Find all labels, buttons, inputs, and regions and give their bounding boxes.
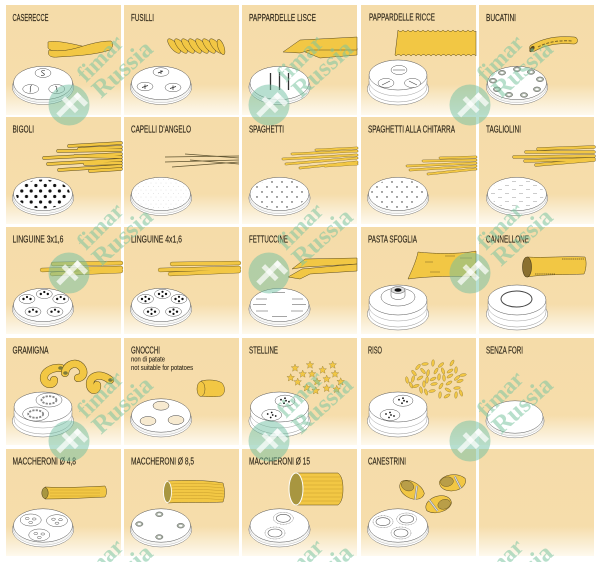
title: tagliolini: TAGLIOLINI [486,124,521,136]
title: fettuccine: FETTUCCINE [249,234,288,246]
panel: bigoli [6,117,121,224]
panel: bucatini [479,5,594,115]
pasta: riso [405,359,467,399]
watermark: fimar Russia logos and text: fimar [272,30,328,87]
watermark: fimar Russia logos and text: fimar [472,198,528,255]
title: linguine 4x1,6: LINGUINE 4x1,6 [131,234,182,246]
pasta: canestrini [396,472,467,516]
die: bucatini [486,66,548,105]
die: maccheroni 8,5 [130,509,192,547]
panel: capelli d'angelo [124,117,239,224]
die: tagliolini [486,177,548,216]
watermark: fimar Russia logos and text: Russia [87,203,159,271]
title: cannellone: CANNELLONE [486,234,529,246]
die: maccheroni 4,8 [12,509,74,547]
panel: fusilli [124,5,239,115]
panel: linguine 4x1,6 [124,227,239,334]
pasta: pappardelle ricce [395,30,476,56]
title: maccheroni 4,8: MACCHERONI Ø 4,8 [12,456,76,468]
title: canestrini: CANESTRINI [368,456,406,468]
panel: caserecce [6,5,121,115]
title: riso: RISO [368,344,382,356]
title: stelline: STELLINE [249,344,278,356]
pasta: spaghetti [283,148,357,168]
watermark: fimar Russia logos and text: Russia [487,35,559,103]
die: spaghetti [249,177,310,216]
panel: maccheroni 15 [242,449,357,556]
title: bigoli: BIGOLI [12,124,34,136]
pasta: capelli d'angelo [165,154,239,167]
pasta: tagliolini [514,147,594,165]
panel: tagliolini [479,117,594,224]
title: capelli d'angelo: CAPELLI D'ANGELO [131,124,191,136]
watermark: fimar Russia logos and text: fimar [72,198,128,255]
title: fusilli: FUSILLI [131,12,154,24]
pasta: maccheroni 15 [289,473,343,505]
die: gnocchi [130,399,192,437]
panel: empty [479,449,594,556]
watermark: fimar Russia logos and text: Russia [487,371,559,439]
title: senza fori: SENZA FORI [486,344,523,356]
pasta: maccheroni 8,5 [164,480,224,503]
die: fettuccine [249,288,310,326]
panel: canestrini [361,449,476,556]
die: pappardelle lisce [249,66,310,105]
pasta: gnocchi [197,380,225,397]
watermark: fimar Russia logos and text: fimar [472,30,528,87]
watermark: fimar Russia logos and text: Russia [87,35,159,103]
title: bucatini: BUCATINI [486,12,516,24]
panel: pasta sfoglia [361,227,476,334]
note: gnocchi [131,354,193,372]
panel: pappardelle ricce [361,5,476,115]
watermark: fimar Russia logos and text: Russia [287,203,359,271]
pasta: stelline [287,361,345,394]
pasta: bucatini [528,40,574,53]
die: riso [367,392,429,437]
die: linguine 4x1,6 [130,288,192,326]
pasta: bigoli [44,143,121,171]
pasta: maccheroni 4,8 [42,486,106,499]
panel: maccheroni 8,5 [124,449,239,556]
die: fusilli [130,66,192,105]
title: linguine 3x1,6: LINGUINE 3x1,6 [12,234,64,246]
pasta: linguine 3x1,6 [42,263,121,274]
panel: stelline [242,338,357,445]
pasta: spaghetti alla chitarra [407,157,476,174]
watermark: fimar Russia logos and text: Russia [87,371,159,439]
panel: spaghetti alla chitarra [361,117,476,224]
pasta: fusilli [166,37,227,56]
watermark: fimar Russia logos and text: fimar [272,198,328,255]
die: bigoli [12,177,74,216]
die: linguine 3x1,6 [12,288,74,326]
die: spaghetti alla chitarra [367,177,429,216]
die: senza fori [486,401,544,438]
panel: gnocchi [124,338,239,445]
panel: linguine 3x1,6 [6,227,121,334]
watermark: fimar Russia logos and text: fimar [272,366,328,423]
title: caserecce: CASERECCE [12,12,48,24]
panel: riso [361,338,476,445]
panel: maccheroni 4,8 [6,449,121,556]
title: pasta sfoglia: PASTA SFOGLIA [368,234,417,246]
watermark: fimar Russia logos and text: fimar [472,366,528,423]
watermark: fimar Russia logos and text: fimar [72,30,128,87]
title: pappardelle ricce: PAPPARDELLE RICCE [369,12,435,24]
panel: cannellone [479,227,594,334]
die: gramigna [12,392,74,437]
note: gnocchi: not suitable for potatoes [131,363,193,372]
watermark: fimar Russia logos and text: Russia [287,371,359,439]
die: cannellone [486,285,548,330]
title: maccheroni 8,5: MACCHERONI Ø 8,5 [131,456,194,468]
title: gramigna: GRAMIGNA [12,344,48,356]
title: gnocchi: GNOCCHI [131,344,160,356]
pasta: gramigna [44,364,113,390]
title: pappardelle lisce: PAPPARDELLE LISCE [249,12,316,24]
pasta: caserecce [48,41,113,57]
watermark: fimar Russia logos and text: Russia [487,203,559,271]
watermark: fimar Russia logos and text: Russia [287,35,359,103]
watermark: fimar Russia logos and text: fimar [72,366,128,423]
panel: gramigna [6,338,121,445]
pasta: pappardelle lisce [283,37,357,58]
pasta: cannellone [522,257,586,277]
panel: senza fori [479,338,594,445]
pasta: pasta sfoglia [408,251,476,279]
die: caserecce [12,66,74,105]
die: canestrini [367,509,429,547]
title: maccheroni 15: MACCHERONI Ø 15 [249,456,310,468]
panel: fettuccine [242,227,357,334]
die: maccheroni 15 [249,509,310,547]
pasta: linguine 4x1,6 [160,263,239,274]
die: pappardelle ricce [367,60,429,105]
title: spaghetti: SPAGHETTI [249,124,284,136]
note: gnocchi: non di patate [131,354,165,364]
title: spaghetti alla chitarra: SPAGHETTI ALLA CHITARRA [368,124,455,136]
panel: spaghetti [242,117,357,224]
die: pasta sfoglia [367,285,429,330]
pasta: fettuccine [288,258,357,279]
die: stelline [249,392,310,437]
die: capelli d'angelo [130,177,192,216]
panel: pappardelle lisce [242,5,357,115]
